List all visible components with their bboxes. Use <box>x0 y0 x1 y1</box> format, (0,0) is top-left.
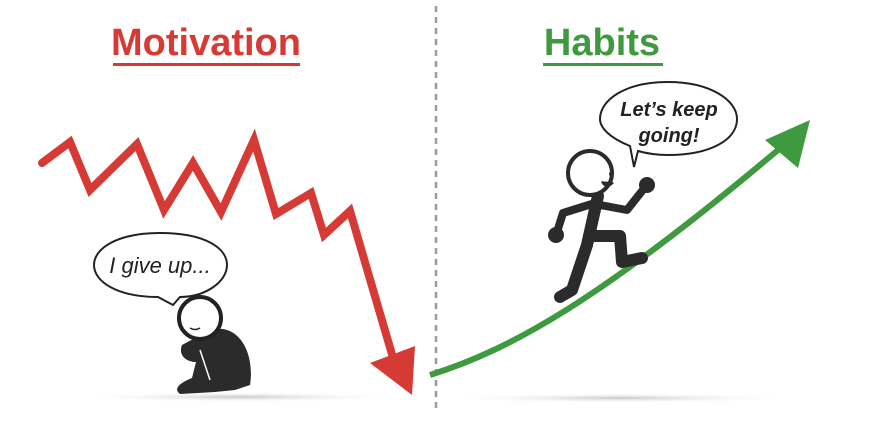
speech bubble: I give up <box>94 233 227 305</box>
speech bubble: Let's keep going: going! <box>637 125 700 147</box>
speech bubble: Let's keep going: Let’s keep <box>620 99 718 121</box>
shadows <box>80 392 795 403</box>
title: Habits: Habits <box>544 22 660 64</box>
speech bubble: I give up: I give up... <box>109 253 211 278</box>
speech bubble: Let's keep going <box>600 82 737 167</box>
red declining zigzag arrow <box>42 140 415 395</box>
sitting sad figure <box>177 297 251 394</box>
green rising arrow <box>430 120 810 375</box>
walking happy figure <box>548 151 655 297</box>
title: Motivation: Motivation <box>111 22 301 64</box>
